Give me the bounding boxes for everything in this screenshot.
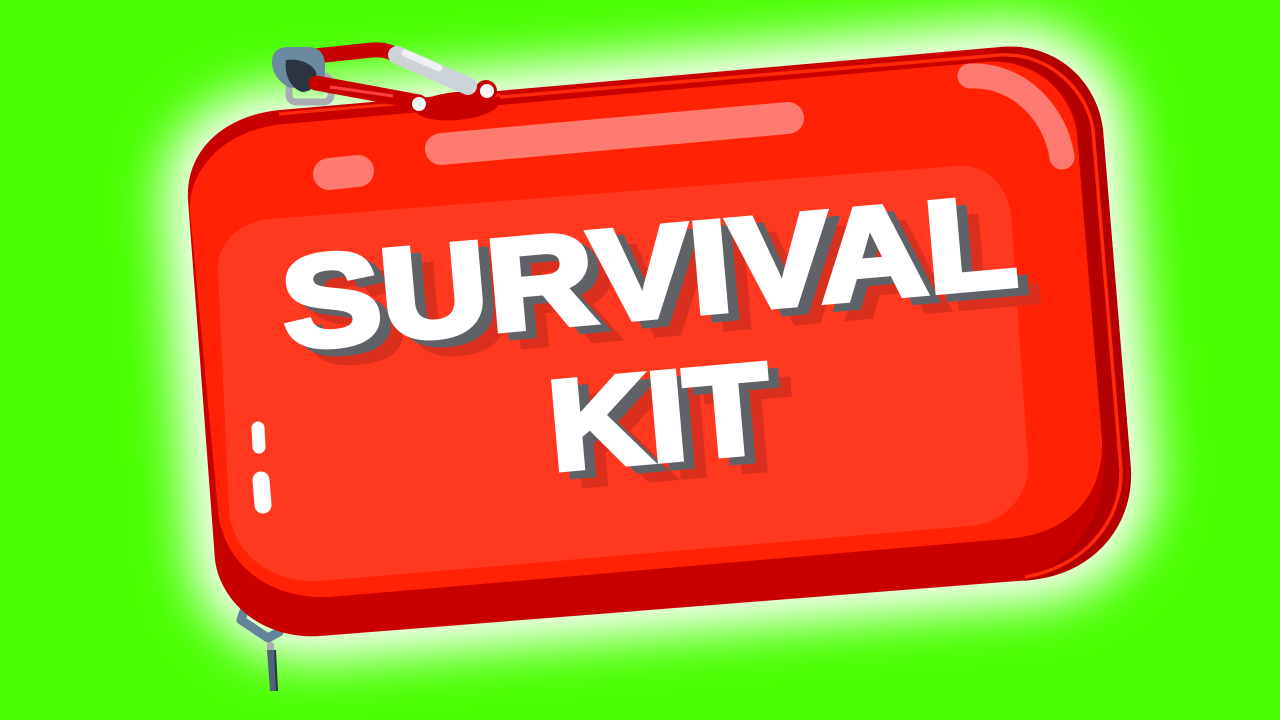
sleeve highlight bbox=[405, 53, 439, 68]
rivet left bbox=[412, 97, 426, 111]
title: KIT: KIT bbox=[554, 343, 787, 504]
clip shadow on bag bbox=[414, 88, 500, 124]
silver sleeve bbox=[397, 55, 468, 86]
upper red arm bbox=[315, 50, 400, 58]
title: SURVIVAL: SURVIVAL bbox=[276, 167, 1022, 377]
highlight: white dash lower bbox=[261, 480, 263, 505]
icon: lower zipper pull bbox=[241, 608, 279, 691]
bag front face bbox=[190, 62, 1102, 597]
title: SURVIVAL: SURVIVAL bbox=[299, 183, 1045, 393]
highlight: top right corner bbox=[970, 76, 1062, 157]
bag outer shell bbox=[188, 47, 1131, 636]
title: KIT: KIT bbox=[543, 336, 776, 497]
rivet right bbox=[480, 84, 494, 98]
panel: survival kit bag bbox=[188, 47, 1131, 636]
arm highlight bbox=[330, 87, 393, 96]
top zipper tape bbox=[279, 95, 500, 114]
icon: carabiner zipper clip bbox=[272, 47, 500, 124]
grey ring bbox=[289, 76, 331, 102]
inner raised panel bbox=[218, 166, 1028, 581]
title: SURVIVAL: SURVIVAL bbox=[287, 174, 1033, 384]
zipper line bbox=[500, 55, 1121, 577]
white glow behind the bag bbox=[188, 47, 1131, 636]
blue-grey loop bbox=[272, 47, 325, 88]
highlight: small pill bbox=[329, 171, 358, 174]
highlight: white dash upper bbox=[258, 428, 259, 447]
bag right rim bbox=[985, 47, 1131, 581]
title: KIT: KIT bbox=[566, 352, 799, 513]
lower red arm bbox=[316, 83, 419, 102]
clip end bbox=[475, 80, 497, 102]
dark knot bbox=[286, 60, 316, 92]
highlight: long bar bbox=[441, 118, 788, 149]
